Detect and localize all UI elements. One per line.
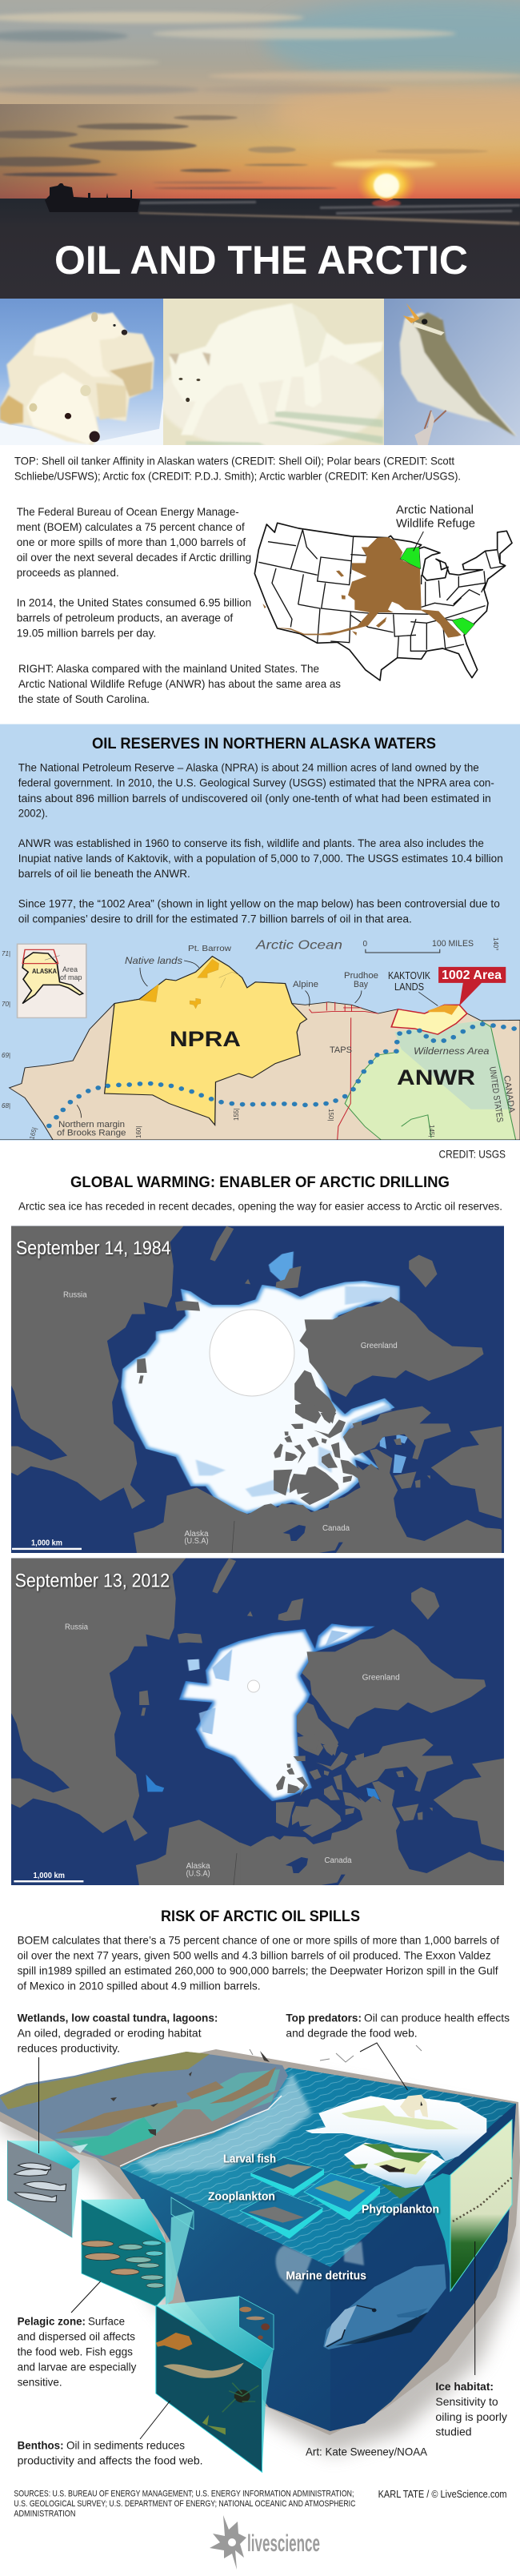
text block: ANWR: barrels of oil lie beneath the ANWR.	[18, 867, 190, 880]
label: marine detritus: Marine detritus	[286, 2269, 366, 2282]
text block: NPRA: The National Petroleum Reserve – Alaska (NPRA) is about 24 million acres of land owned by the	[18, 761, 479, 774]
text block: BOEM spill chance: oil over the next several decades if Arctic drilling	[17, 551, 251, 564]
callout: pelagic zone: and dispersed oil affects	[18, 2330, 135, 2343]
region labels: (U.S.A)	[186, 1870, 210, 1879]
map labels: LANDS	[394, 981, 424, 993]
map labels: CANADA	[502, 1075, 517, 1114]
text block: 1002 Area: Since 1977, the “1002 Area” (shown in light yellow on the map below) has been controversial due to	[18, 897, 500, 910]
logo: livescience: livescience	[247, 2530, 320, 2557]
logo: livescience	[210, 2515, 320, 2570]
text block: NPRA	[18, 761, 494, 820]
callout: pelagic zone: Surface	[88, 2315, 125, 2328]
icon: tanker silhouette	[45, 183, 140, 212]
inset locator map	[18, 944, 86, 1017]
callout: pelagic zone: and larvae are especially	[18, 2361, 136, 2373]
text block: spill risk: of Mexico in 2010 spilled about 4.9 million barrels.	[18, 1979, 261, 1992]
map labels: 100 MILES	[432, 939, 474, 949]
inset: wetlands fish	[7, 2141, 80, 2237]
callout label: 1002 Area: 1002 Area	[442, 969, 502, 982]
region labels	[65, 1623, 400, 1879]
date label: September 13, 2012	[15, 1571, 170, 1592]
text block: US consumption	[17, 596, 251, 639]
map labels: NPRA	[170, 1027, 241, 1051]
map labels: Wilderness Area	[414, 1045, 490, 1057]
callout: ice habitat: Sensitivity to	[435, 2395, 498, 2408]
callout: ice habitat: studied	[435, 2426, 472, 2438]
South Carolina in green	[452, 618, 474, 635]
art credit: Art: Kate Sweeney/NOAA	[306, 2445, 428, 2458]
region labels: Alaska	[186, 1862, 210, 1871]
map labels: Arctic Ocean	[255, 939, 342, 953]
sources: ADMINISTRATION	[14, 2510, 75, 2519]
scale bar: 1,000 km	[31, 1539, 62, 1548]
region labels	[63, 1291, 398, 1546]
map labels: 69|	[2, 1052, 10, 1059]
region labels: Russia	[65, 1623, 88, 1632]
NPRA	[105, 957, 307, 1125]
photo caption	[14, 455, 461, 482]
coastal land	[0, 2052, 288, 2168]
map label: Arctic National Wildlife Refuge	[396, 504, 475, 531]
photo caption: TOP: Shell oil tanker Affinity in Alaskan waters (CREDIT: Shell Oil); Polar bears (CREDIT: Scott	[14, 455, 454, 467]
text block: ANWR: ANWR was established in 1960 to conserve its fish, wildlife and plants. The area also includes the	[18, 837, 484, 849]
map labels: of map	[60, 973, 82, 981]
callout: benthos: productivity and affects the food web.	[18, 2454, 203, 2467]
text block: US consumption: In 2014, the United States consumed 6.95 billion	[17, 596, 251, 608]
map labels: Prudhoe	[344, 971, 378, 981]
text block: spill risk: spill in1989 spilled an estimated 260,000 to 900,000 barrels; the Deepwater Horizon spill in the Gulf	[18, 1964, 498, 1976]
map labels: 70|	[2, 1001, 10, 1008]
photo: arctic fox	[159, 299, 385, 451]
text block: map explanation	[18, 662, 341, 705]
text block: US consumption: barrels of petroleum products, an average of	[17, 611, 233, 624]
map labels: Area	[62, 965, 78, 973]
panel: oil reserves in northern Alaska	[0, 724, 520, 2570]
label: zooplankton: Zooplankton	[208, 2190, 275, 2204]
callout: top predators: Oil can produce health effects	[364, 2011, 510, 2024]
subtitle: sea ice: Arctic sea ice has receded in recent decades, opening the way for easier access to Arctic oil reserves.	[18, 1200, 502, 1213]
small fish window	[171, 2197, 194, 2229]
callout: pelagic zone: the food web. Fish eggs	[18, 2345, 133, 2358]
arrows	[77, 961, 438, 1117]
map labels: 150|	[327, 1109, 334, 1121]
date label: September 14, 1984	[16, 1238, 171, 1259]
callout: top predators: and degrade the food web.	[286, 2026, 418, 2039]
dotted line: margin of Brooks Range	[46, 1021, 517, 1128]
title: OIL AND THE ARCTIC	[54, 238, 468, 283]
callout: wetlands: Wetlands, low coastal tundra, lagoons:	[18, 2011, 218, 2024]
wilderness area	[394, 1021, 513, 1109]
map: sea ice September 14, 1984	[9, 1226, 504, 1555]
text block: BOEM spill chance	[17, 505, 251, 579]
hero photo: tanker at sunset	[0, 0, 520, 299]
sea surface	[120, 2068, 516, 2267]
map labels: Alpine	[293, 980, 318, 989]
text block: 1002 Area: oil companies’ desire to drill for the estimated 7.7 billion barrels of oil in that area.	[18, 913, 412, 925]
text block: NPRA: 2002).	[18, 807, 48, 820]
ice floe	[306, 2095, 486, 2199]
map labels: Pt. Barrow	[188, 944, 231, 953]
scale bar	[14, 1872, 83, 1882]
map labels: ANWR	[397, 1065, 475, 1089]
region labels: Canada	[322, 1524, 350, 1533]
text block: 1002 Area	[18, 897, 500, 925]
whale	[323, 2264, 446, 2349]
native lands	[139, 959, 219, 1009]
block shadow	[0, 2081, 520, 2454]
inset: ice habitat	[424, 2120, 512, 2291]
map label: Arctic National Wildlife Refuge: Wildlife Refuge	[396, 517, 475, 531]
map labels: Bay	[354, 980, 368, 989]
text block: ANWR	[18, 837, 503, 880]
heading: global warming: GLOBAL WARMING: ENABLER OF ARCTIC DRILLING	[70, 1174, 450, 1191]
text block: spill risk: BOEM calculates that there’s a 75 percent chance of one or more spills of more than 1,000 barrels of	[18, 1933, 499, 1946]
map labels: 165|	[28, 1126, 38, 1141]
map: Alaska compared with mainland US	[254, 523, 512, 680]
map labels: 155|	[233, 1109, 240, 1121]
water column	[120, 2068, 516, 2431]
map labels: 160|	[135, 1126, 142, 1138]
callout: wetlands	[18, 2011, 218, 2054]
label: phytoplankton: Phytoplankton	[362, 2203, 439, 2217]
text block: BOEM spill chance: one or more spills of more than 1,000 barrels of	[17, 536, 246, 548]
photo: arctic warbler	[384, 299, 520, 445]
text block: ANWR: Inupiat native lands of Kaktovik, with a population of 5,000 to 7,000. The USGS estimates 10.4 billion	[18, 852, 503, 865]
map: northern Alaska	[0, 937, 520, 1141]
region labels: Greenland	[361, 1342, 398, 1350]
TAPS pipeline	[309, 1002, 378, 1140]
map labels: of Brooks Range	[57, 1129, 126, 1138]
text block: NPRA: tains about 896 million barrels of undiscovered oil (only one-tenth of what had been estimated in	[18, 792, 491, 804]
inset windows: plankton plates	[240, 2157, 380, 2239]
sources	[14, 2489, 355, 2519]
map labels: Northern margin	[58, 1120, 125, 1130]
1002 area	[391, 1005, 467, 1034]
marine detritus	[276, 2241, 364, 2294]
text block: BOEM spill chance: proceeds as planned.	[17, 566, 119, 579]
region labels: Russia	[63, 1291, 87, 1300]
diagram: Arctic ecosystem block	[0, 2043, 520, 2472]
map labels: 68|	[2, 1102, 10, 1109]
text block: spill risk: oil over the next 77 years, given 500 wells and 4.3 billion barrels of oil produced. The Exxon Valdez	[18, 1948, 491, 1961]
map labels	[2, 937, 517, 1141]
heading: risk of spills: RISK OF ARCTIC OIL SPILLS	[161, 1908, 360, 1925]
region labels: Greenland	[362, 1674, 400, 1683]
photo: polar bears	[0, 299, 163, 445]
map labels: TAPS	[330, 1045, 352, 1055]
heading: OIL RESERVES IN NORTHERN ALASKA WATERS	[92, 736, 436, 752]
text block: map explanation: RIGHT: Alaska compared with the mainland United States. The	[18, 662, 319, 675]
pole circle	[248, 1680, 259, 1692]
sea ice 2012	[146, 1623, 380, 1801]
sources: U.S. GEOLOGICAL SURVEY; U.S. DEPARTMENT OF ENERGY; NATIONAL OCEANIC AND ATMOSPHERIC	[14, 2499, 355, 2509]
scale bar	[12, 1539, 82, 1550]
sea ice 1984	[121, 1251, 408, 1515]
scale bar	[366, 949, 440, 953]
sources: SOURCES: U.S. BUREAU OF ENERGY MANAGEMENT; U.S. ENERGY INFORMATION ADMINISTRATION;	[14, 2489, 354, 2498]
map: sea ice September 13, 2012	[11, 1558, 504, 1887]
wave surf	[136, 2073, 312, 2173]
ANWR in green	[400, 547, 421, 569]
map labels: KAKTOVIK	[388, 970, 431, 981]
callout: benthos	[18, 2439, 203, 2467]
ice-free pole circle	[210, 1310, 294, 1396]
ANWR	[345, 1021, 516, 1140]
callout: ice habitat: Ice habitat:	[435, 2380, 494, 2393]
land	[10, 957, 520, 1140]
callout: wetlands: An oiled, degraded or eroding habitat	[18, 2026, 202, 2039]
map labels: 71|	[2, 950, 10, 957]
map labels: 145|	[428, 1125, 435, 1137]
map labels: Native lands	[125, 955, 182, 966]
region labels: (U.S.A)	[184, 1537, 208, 1546]
seabirds and ducks	[110, 2045, 422, 2136]
callout: ice habitat: oiling is poorly	[435, 2410, 507, 2423]
label: larval fish: Larval fish	[223, 2153, 276, 2166]
map labels: 0	[363, 940, 368, 949]
text block: BOEM spill chance: The Federal Bureau of Ocean Energy Manage-	[17, 505, 239, 518]
text block: NPRA: federal government. In 2010, the U.S. Geological Survey (USGS) estimated that the NPRA area con-	[18, 776, 494, 789]
text block: BOEM spill chance: ment (BOEM) calculates a 75 percent chance of	[17, 520, 245, 533]
sediment	[0, 2049, 520, 2435]
callout: benthos: Benthos:	[18, 2439, 64, 2452]
text block: US consumption: 19.05 million barrels per day.	[17, 626, 156, 639]
callout: top predators	[286, 2011, 510, 2039]
inset: pelagic zone fish	[82, 2199, 194, 2306]
map labels: ALASKA	[32, 968, 57, 975]
callout: pelagic zone: Pelagic zone:	[18, 2315, 86, 2328]
callout: benthos: Oil in sediments reduces	[66, 2439, 185, 2452]
region labels: Canada	[325, 1856, 352, 1865]
callout: pelagic zone: sensitive.	[18, 2376, 62, 2389]
credit: USGS: CREDIT: USGS	[438, 1148, 506, 1161]
text block: map explanation: Arctic National Wildlife Refuge (ANWR) has about the same area as	[18, 677, 341, 690]
map labels: 140°	[492, 937, 499, 951]
callout: top predators: Top predators:	[286, 2011, 362, 2024]
callout: ice habitat	[435, 2380, 507, 2438]
map labels: UNITED STATES	[487, 1066, 505, 1123]
leader lines	[38, 2043, 475, 2439]
text block: map explanation: the state of South Carolina.	[18, 692, 150, 705]
photo caption: Schliebe/USFWS); Arctic fox (CREDIT: P.D.J. Smith); Arctic warbler (CREDIT: Ken Archer/USGS).	[14, 469, 461, 482]
inset: benthos creatures	[156, 2296, 274, 2472]
callout: wetlands: reduces productivity.	[18, 2041, 120, 2054]
callout: 1002 Area pointer	[438, 967, 506, 1005]
region labels: Alaska	[184, 1530, 209, 1539]
map label: Arctic National Wildlife Refuge: Arctic National	[396, 504, 474, 517]
scale bar: 1,000 km	[34, 1872, 65, 1880]
text block: spill risk	[18, 1933, 499, 1992]
callout: pelagic zone	[18, 2315, 136, 2389]
Alaska silhouette	[262, 537, 462, 638]
